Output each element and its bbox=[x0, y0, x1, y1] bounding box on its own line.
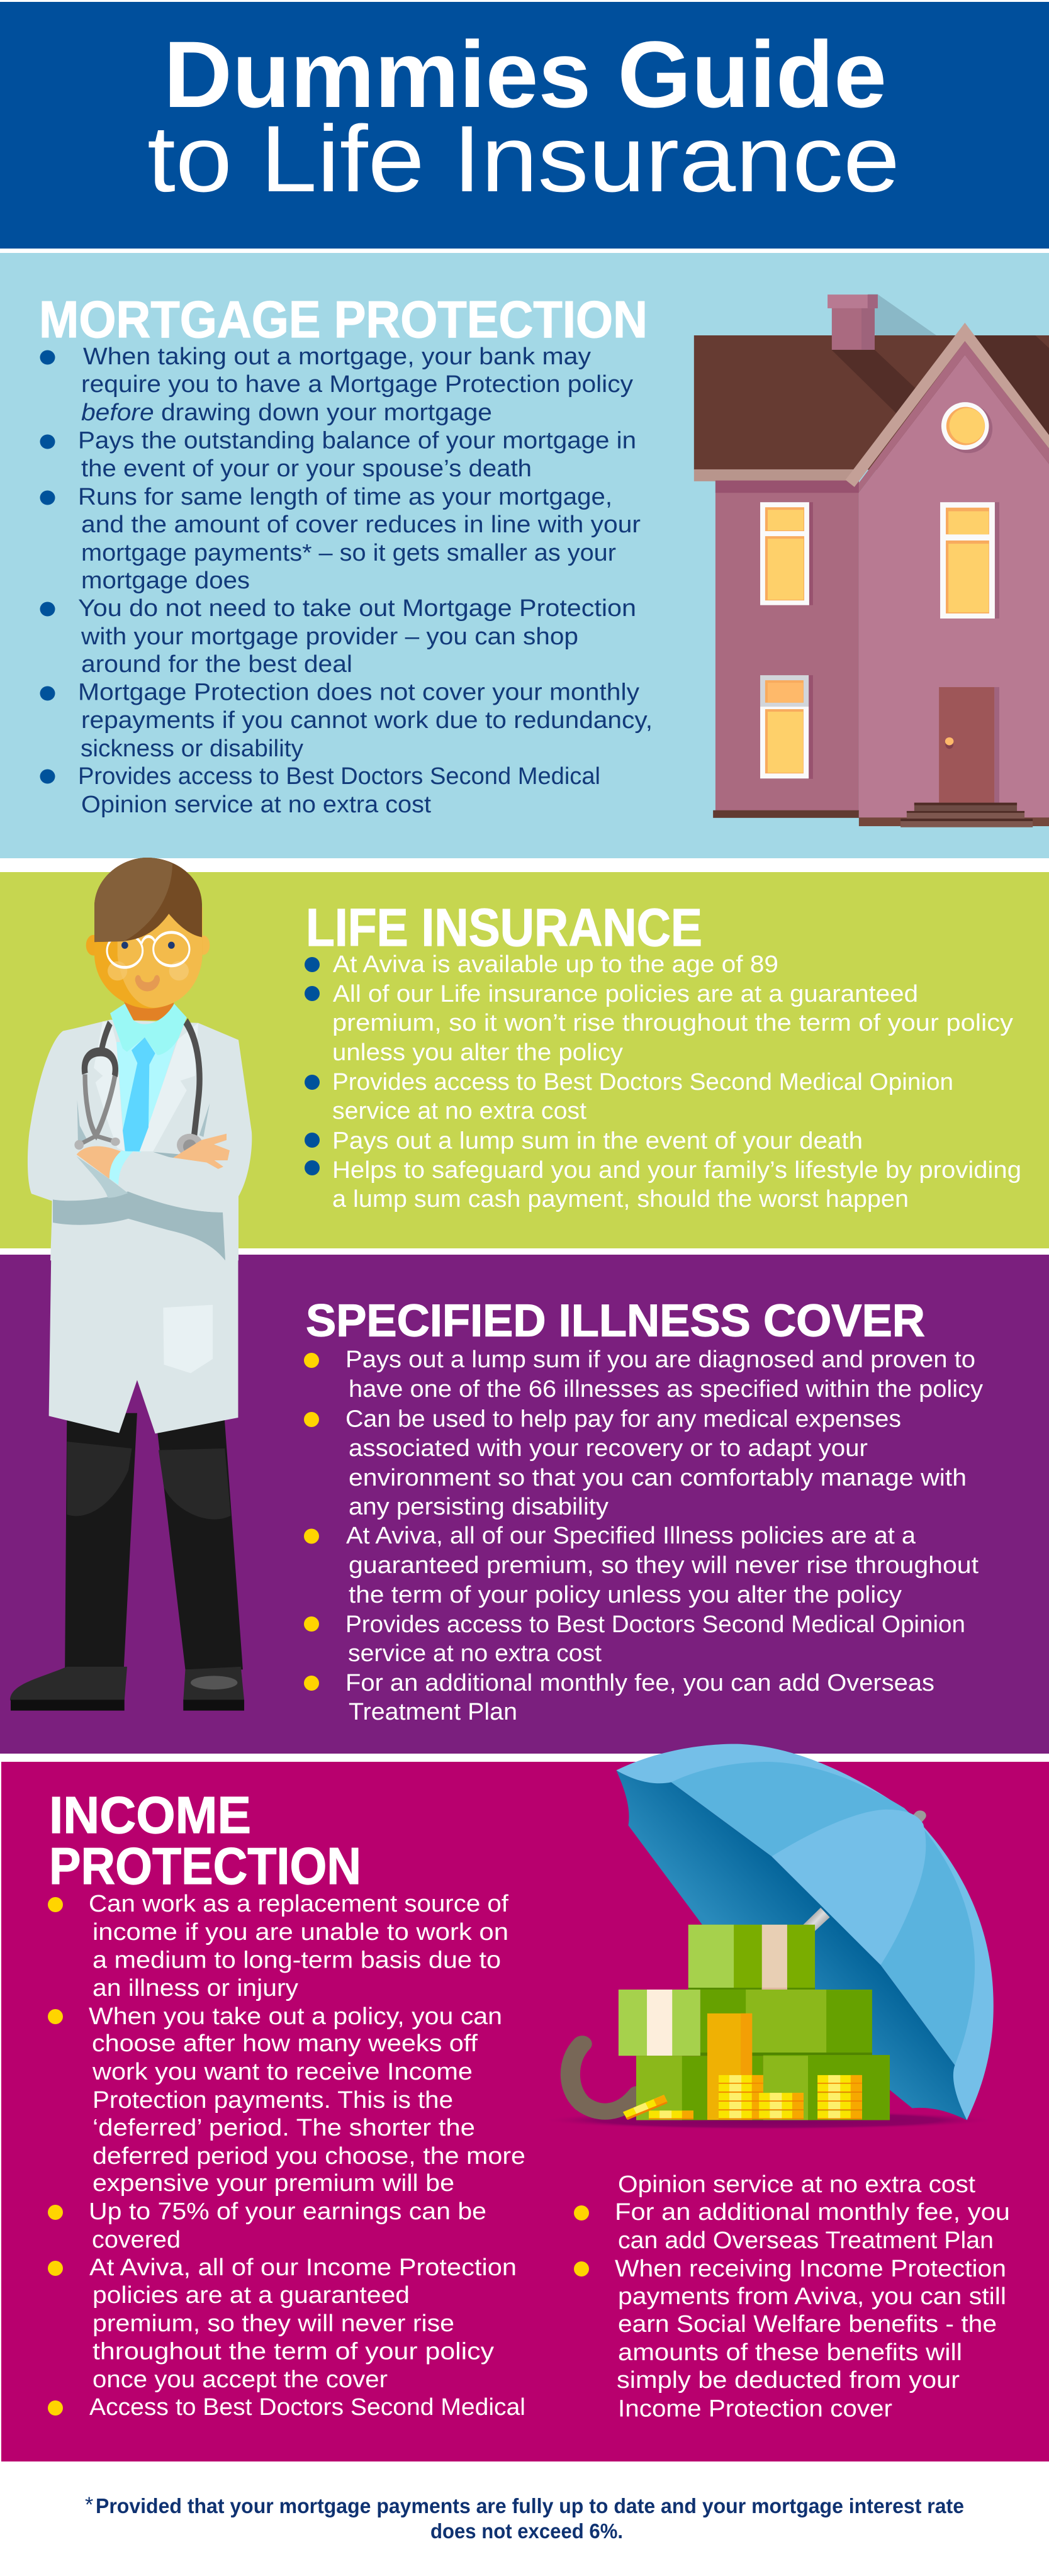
bullet item: mortgage payments* – so it gets smaller as your bbox=[81, 540, 616, 566]
panel: mortgage protection bbox=[0, 253, 1049, 858]
footnote: Provided that your mortgage payments are fully up to date and your mortgage interest rate bbox=[96, 2494, 964, 2517]
footnote: does not exceed 6%. bbox=[430, 2519, 623, 2543]
doctor torso, arms and head bbox=[28, 858, 252, 1260]
heading: income protection bbox=[49, 1786, 361, 1895]
bullet item: Up to 75% of your earnings can be bbox=[89, 2198, 486, 2225]
bullet item: Can work as a replacement source of bbox=[89, 1891, 508, 1917]
title: Dummies Guide bbox=[164, 21, 887, 127]
bullet item: unless you alter the policy bbox=[332, 1039, 623, 1066]
bullet item: a medium to long-term basis due to bbox=[93, 1947, 501, 1973]
bullet item: a lump sum cash payment, should the worst happen bbox=[332, 1186, 909, 1212]
footnote bbox=[85, 2493, 964, 2543]
bullet item: with your mortgage provider – you can shop bbox=[81, 624, 578, 650]
bullet item bbox=[48, 2198, 486, 2253]
bullet item: mortgage does bbox=[81, 568, 250, 594]
heading: life insurance: LIFE INSURANCE bbox=[306, 898, 702, 957]
bullet item: amounts of these benefits will bbox=[618, 2339, 962, 2366]
bullet item: around for the best deal bbox=[81, 651, 352, 678]
bullet item: When taking out a mortgage, your bank may bbox=[83, 344, 591, 370]
bullet item: Runs for same length of time as your mortgage, bbox=[78, 484, 612, 510]
bullet item bbox=[40, 344, 633, 426]
bullet item: Provides access to Best Doctors Second Medical Opinion bbox=[332, 1069, 953, 1095]
bullet item: deferred period you choose, the more bbox=[93, 2143, 525, 2170]
bullet item: the event of your or your spouse’s death bbox=[81, 456, 532, 482]
bullet list: income protection right column bbox=[574, 2171, 1010, 2422]
bullet item: policies are at a guaranteed bbox=[93, 2282, 410, 2309]
bullet item: Can be used to help pay for any medical expenses bbox=[345, 1406, 901, 1432]
bullet item: When receiving Income Protection bbox=[615, 2256, 1006, 2282]
heading: mortgage protection: MORTGAGE PROTECTION bbox=[39, 290, 648, 349]
bullet item: once you accept the cover bbox=[93, 2366, 388, 2393]
bullet item: Provides access to Best Doctors Second Medical bbox=[78, 763, 600, 790]
bullet list: specified illness cover bbox=[304, 1347, 983, 1725]
bullet item: the term of your policy unless you alter the policy bbox=[349, 1582, 902, 1608]
bullet item: income if you are unable to work on bbox=[93, 1919, 508, 1946]
bullet item: Opinion service at no extra cost bbox=[81, 792, 431, 818]
bullet item: Pays out a lump sum if you are diagnosed and proven to bbox=[345, 1347, 975, 1373]
bullet item: When you take out a policy, you can bbox=[89, 2003, 502, 2030]
bullet item: Provides access to Best Doctors Second Medical Opinion bbox=[345, 1611, 965, 1638]
bullet item bbox=[48, 1891, 508, 2002]
bullet item: work you want to receive Income bbox=[92, 2059, 473, 2085]
panel: income protection bbox=[1, 1744, 1049, 2461]
title: to Life Insurance bbox=[147, 106, 900, 211]
bullet item: For an additional monthly fee, you can add Overseas bbox=[345, 1670, 934, 1696]
bullet item bbox=[304, 1670, 934, 1725]
bullet item: premium, so they will never rise bbox=[93, 2310, 454, 2337]
bullet item bbox=[574, 2256, 1006, 2422]
illustration: house bbox=[694, 294, 1049, 827]
bullet item bbox=[40, 428, 636, 482]
bullet item: Treatment Plan bbox=[349, 1699, 517, 1725]
bullet item: sickness or disability bbox=[81, 736, 303, 762]
doctor legs, shoes and lower coat bbox=[10, 1185, 244, 1711]
bullet item: environment so that you can comfortably manage with bbox=[349, 1465, 967, 1491]
bullet item: payments from Aviva, you can still bbox=[618, 2283, 1006, 2310]
panel: title banner bbox=[0, 2, 1049, 249]
bullet item bbox=[304, 1611, 965, 1667]
heading: income protection: PROTECTION bbox=[49, 1837, 361, 1895]
bullet item bbox=[304, 1523, 979, 1608]
bullet item: expensive your premium will be bbox=[93, 2170, 454, 2197]
bullet item bbox=[48, 2254, 517, 2393]
bullet item: Helps to safeguard you and your family’s lifestyle by providing bbox=[332, 1157, 1021, 1184]
illustration: doctor bbox=[10, 858, 252, 1711]
bullet item: premium, so it won’t rise throughout the term of your policy bbox=[332, 1010, 1013, 1036]
bullet item: Pays out a lump sum in the event of your death bbox=[332, 1128, 863, 1154]
bullet item: throughout the term of your policy bbox=[93, 2338, 494, 2365]
bullet item: have one of the 66 illnesses as specified within the policy bbox=[349, 1376, 983, 1403]
bullet item: can add Overseas Treatment Plan bbox=[618, 2227, 994, 2254]
bullet item: covered bbox=[92, 2227, 181, 2253]
bullet item bbox=[305, 1069, 953, 1124]
bullet item bbox=[40, 763, 600, 818]
bullet item: an illness or injury bbox=[93, 1975, 298, 2002]
bullet item: earn Social Welfare benefits - the bbox=[618, 2311, 997, 2338]
bullet item: For an additional monthly fee, you bbox=[615, 2199, 1010, 2226]
bullet item: require you to have a Mortgage Protection policy bbox=[81, 371, 633, 398]
bullet item: associated with your recovery or to adapt your bbox=[349, 1435, 868, 1462]
title bbox=[147, 21, 900, 211]
bullet item: choose after how many weeks off bbox=[92, 2030, 478, 2057]
bullet item: Pays the outstanding balance of your mortgage in bbox=[78, 428, 636, 454]
bullet item: Access to Best Doctors Second Medical bbox=[89, 2394, 525, 2421]
bullet list: income protection right column: Opinion service at no extra cost bbox=[618, 2171, 975, 2198]
illustration: umbrella and money bbox=[541, 1744, 996, 2130]
bullet item: repayments if you cannot work due to redundancy, bbox=[81, 707, 653, 734]
bullet item bbox=[40, 595, 636, 678]
bullet item: guaranteed premium, so they will never rise throughout bbox=[349, 1552, 979, 1579]
bullet item bbox=[40, 680, 653, 762]
bullet item: All of our Life insurance policies are at a guaranteed bbox=[333, 981, 918, 1007]
bullet item bbox=[48, 2003, 525, 2197]
bullet item: Income Protection cover bbox=[618, 2396, 892, 2422]
bullet item: simply be deducted from your bbox=[617, 2367, 960, 2394]
bullet item bbox=[574, 2199, 1010, 2254]
bullet item: Mortgage Protection does not cover your monthly bbox=[78, 680, 639, 706]
bullet list: life insurance bbox=[305, 951, 1021, 1212]
bullet item: At Aviva is available up to the age of 89 bbox=[333, 951, 778, 978]
panel: specified illness cover bbox=[0, 1255, 1049, 1754]
bullet item: any persisting disability bbox=[349, 1494, 609, 1520]
bullet list: income protection left column bbox=[48, 1891, 525, 2421]
heading: income protection: INCOME bbox=[49, 1786, 251, 1844]
panel: life insurance bbox=[0, 872, 1049, 1248]
bullet item bbox=[305, 981, 1013, 1066]
bullet item: Protection payments. This is the bbox=[93, 2087, 453, 2114]
bullet item bbox=[305, 1157, 1021, 1212]
heading: specified illness cover: SPECIFIED ILLNESS COVER bbox=[306, 1296, 925, 1347]
bullet item: before drawing down your mortgage bbox=[81, 400, 492, 426]
bullet item: ‘deferred’ period. The shorter the bbox=[93, 2115, 475, 2141]
bullet item bbox=[40, 484, 641, 594]
bullet list: mortgage protection bbox=[40, 344, 653, 818]
bullet item: and the amount of cover reduces in line with your bbox=[81, 512, 641, 538]
bullet item bbox=[304, 1347, 983, 1403]
footnote: * bbox=[85, 2493, 93, 2517]
bullet item bbox=[304, 1406, 967, 1520]
bullet item: You do not need to take out Mortgage Protection bbox=[78, 595, 636, 622]
bullet item: At Aviva, all of our Specified Illness policies are at a bbox=[346, 1523, 916, 1549]
bullet item: service at no extra cost bbox=[348, 1640, 602, 1667]
bullet item: At Aviva, all of our Income Protection bbox=[89, 2254, 517, 2281]
bullet item: service at no extra cost bbox=[332, 1098, 586, 1124]
